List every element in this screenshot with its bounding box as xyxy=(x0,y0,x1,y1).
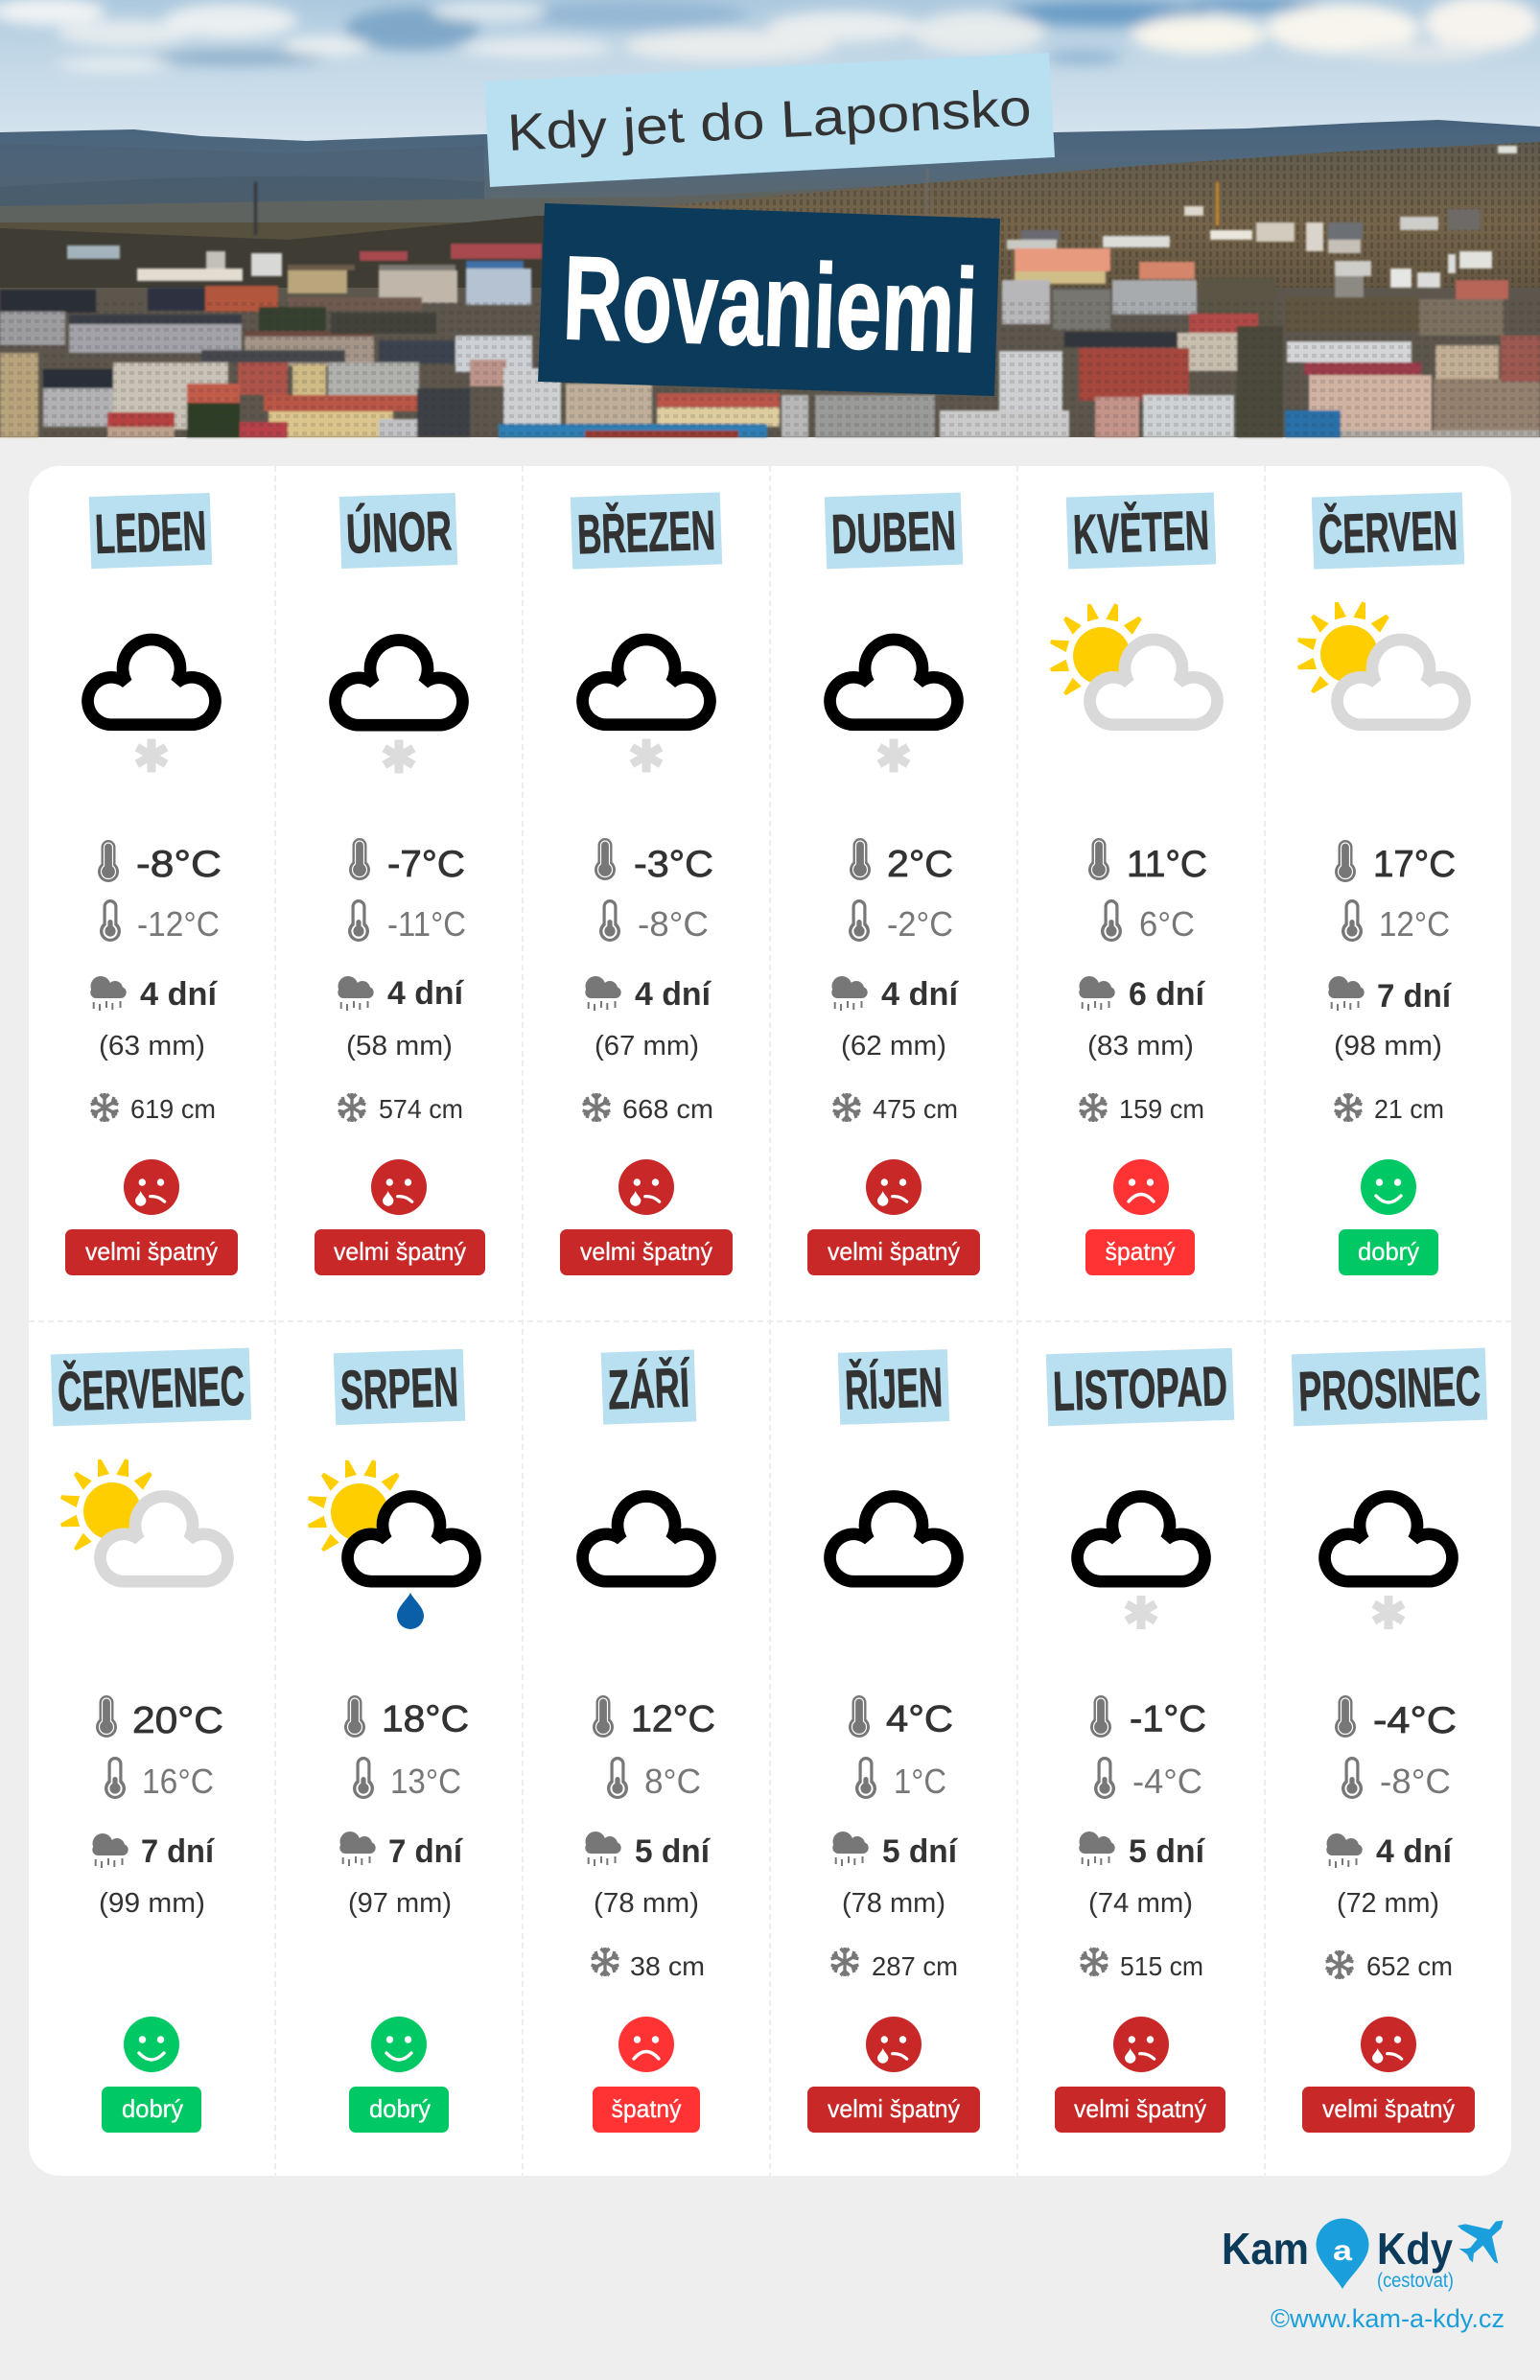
month heading: ČERVENEC xyxy=(51,1348,251,1426)
rainy days xyxy=(339,1832,464,1870)
month heading: ŘÍJEN xyxy=(838,1349,949,1425)
low temperature: 6°C xyxy=(1139,904,1195,944)
column: PROSINEC xyxy=(1292,1348,1487,2133)
rainy days: 5 dní xyxy=(635,1833,712,1870)
rainy days xyxy=(832,1832,959,1870)
rainy days xyxy=(1328,976,1453,1015)
rating badge: dobrý xyxy=(369,2094,431,2123)
high temperature xyxy=(849,1695,953,1739)
rainy days: 7 dní xyxy=(141,1833,215,1870)
month heading: ČERVENEC: ČERVENEC xyxy=(57,1355,245,1423)
icon: rating face xyxy=(866,2017,922,2072)
rainy days xyxy=(585,1832,712,1870)
high temperature: -4°C xyxy=(1373,1700,1457,1741)
snowfall: 515 cm xyxy=(1120,1951,1203,1981)
low temperature xyxy=(855,1757,946,1801)
low temperature xyxy=(1342,899,1450,944)
rainy days: 4 dní xyxy=(635,976,712,1013)
icon: rating face xyxy=(371,1159,427,1215)
title banner: Kdy jet do Laponsko: Kdy jet do Laponsko xyxy=(506,79,1033,162)
icon: rating face xyxy=(618,1159,674,1215)
snowfall: 38 cm xyxy=(630,1951,705,1981)
precipitation: (78 mm) xyxy=(594,1888,699,1919)
icon: rating face xyxy=(1113,1159,1169,1215)
month heading: KVĚTEN: KVĚTEN xyxy=(1072,500,1210,566)
snowfall: 21 cm xyxy=(1374,1094,1444,1124)
column: ČERVEN xyxy=(1297,492,1464,1275)
snowfall xyxy=(830,1948,958,1981)
high temperature xyxy=(595,838,713,885)
rainy days: 5 dní xyxy=(882,1833,959,1870)
rating badge: velmi špatný xyxy=(334,1237,466,1266)
rating badge: velmi špatný xyxy=(1322,2094,1455,2123)
column: KVĚTEN xyxy=(1050,492,1217,1275)
logo: Kam a Kdy xyxy=(1222,2219,1504,2292)
rainy days xyxy=(585,976,712,1013)
low temperature: -11°C xyxy=(387,904,466,944)
rainy days: 4 dní xyxy=(387,975,465,1012)
logo: Kam a Kdy: a xyxy=(1333,2235,1352,2267)
column: BŘEZEN xyxy=(560,492,733,1275)
rating badge xyxy=(315,1229,485,1275)
high temperature: 4°C xyxy=(886,1699,953,1739)
rating badge xyxy=(593,2087,700,2133)
precipitation: (62 mm) xyxy=(841,1031,946,1062)
high temperature: 17°C xyxy=(1373,844,1456,885)
low temperature xyxy=(599,899,709,944)
rating badge: velmi špatný xyxy=(1074,2094,1206,2123)
high temperature xyxy=(593,1695,715,1739)
icon: cloud with snow xyxy=(1078,1497,1204,1629)
title panel: Rovaniemi xyxy=(538,203,1000,396)
snowfall xyxy=(1325,1950,1453,1981)
rating badge: velmi špatný xyxy=(828,2094,960,2123)
icon: sun, dark cloud, rain drop xyxy=(308,1459,475,1629)
snowfall xyxy=(832,1093,958,1124)
rainy days: 4 dní xyxy=(140,976,219,1013)
rating badge xyxy=(807,2087,980,2133)
rating badge: dobrý xyxy=(1358,1237,1419,1266)
column: LEDEN xyxy=(65,493,238,1275)
high temperature: 2°C xyxy=(887,844,953,885)
icon: cloud with snow xyxy=(583,640,710,773)
panel: months card xyxy=(29,466,1511,2176)
precipitation: (78 mm) xyxy=(842,1888,945,1919)
icon: sun behind light cloud xyxy=(60,1458,227,1581)
snowfall: 287 cm xyxy=(872,1951,958,1981)
rating badge xyxy=(349,2087,449,2133)
low temperature xyxy=(1342,1757,1451,1801)
high temperature xyxy=(98,840,222,885)
high temperature: -1°C xyxy=(1130,1699,1206,1739)
rating badge xyxy=(1085,1229,1195,1275)
column: ÚNOR xyxy=(315,493,485,1275)
low temperature: -2°C xyxy=(887,904,953,944)
low temperature xyxy=(1101,899,1195,944)
icon: cloud with snow xyxy=(88,640,215,773)
icon: rating face xyxy=(124,1159,179,1215)
high temperature: 12°C xyxy=(631,1699,715,1739)
low temperature: -12°C xyxy=(137,904,220,944)
low temperature: -4°C xyxy=(1132,1762,1202,1801)
icon: sun behind light cloud xyxy=(1297,601,1464,725)
title panel: Rovaniemi: Rovaniemi xyxy=(561,232,979,378)
high temperature xyxy=(850,838,953,885)
icon: airplane xyxy=(1458,2221,1504,2264)
high temperature: 18°C xyxy=(382,1699,469,1739)
rating badge xyxy=(807,1229,980,1275)
icon: cloud with snow xyxy=(336,641,462,773)
rating badge xyxy=(1339,1229,1438,1275)
icon: rating face xyxy=(1361,2017,1416,2072)
rainy days: 4 dní xyxy=(1376,1833,1454,1870)
high temperature: -7°C xyxy=(387,844,465,885)
rating badge: dobrý xyxy=(122,2094,183,2123)
month heading: ZÁŘÍ xyxy=(601,1349,696,1425)
low temperature: 16°C xyxy=(142,1762,214,1801)
rainy days xyxy=(90,976,219,1013)
high temperature xyxy=(1090,1695,1206,1739)
snowfall xyxy=(582,1093,713,1124)
low temperature: -8°C xyxy=(638,904,709,944)
icon: rating face xyxy=(1361,1159,1416,1215)
snowfall: 574 cm xyxy=(379,1094,463,1124)
rainy days xyxy=(338,975,465,1012)
snowfall: 475 cm xyxy=(873,1094,958,1124)
low temperature: 8°C xyxy=(644,1762,701,1801)
snowfall xyxy=(1080,1948,1203,1981)
low temperature: 1°C xyxy=(894,1762,946,1801)
website url: ©www.kam-a-kdy.cz xyxy=(1271,2304,1505,2333)
low temperature xyxy=(849,899,953,944)
snowfall xyxy=(591,1948,705,1981)
column: LISTOPAD xyxy=(1046,1348,1234,2133)
precipitation: (74 mm) xyxy=(1088,1888,1193,1919)
month heading: ÚNOR: ÚNOR xyxy=(345,500,453,566)
column: SRPEN xyxy=(308,1349,475,2133)
snowfall xyxy=(1334,1093,1444,1124)
month heading: LEDEN xyxy=(89,493,212,569)
precipitation: (99 mm) xyxy=(99,1888,205,1919)
low temperature: 12°C xyxy=(1379,904,1450,944)
rainy days: 7 dní xyxy=(1377,978,1453,1015)
logo: Kam a Kdy: (cestovat) xyxy=(1377,2270,1454,2292)
logo: Kam a Kdy: Kam xyxy=(1222,2224,1309,2274)
high temperature: 20°C xyxy=(132,1700,223,1741)
high temperature: 11°C xyxy=(1127,844,1207,885)
high temperature: -8°C xyxy=(136,844,222,885)
rainy days xyxy=(92,1833,215,1870)
snowfall: 159 cm xyxy=(1119,1094,1204,1124)
low temperature xyxy=(100,899,220,944)
snowfall: 652 cm xyxy=(1366,1951,1453,1981)
high temperature xyxy=(96,1695,223,1741)
rating badge: špatný xyxy=(612,2094,681,2123)
month heading: LISTOPAD: LISTOPAD xyxy=(1052,1355,1228,1423)
snowfall xyxy=(338,1093,463,1124)
rainy days xyxy=(1326,1833,1454,1870)
column: ŘÍJEN xyxy=(807,1349,980,2133)
icon: rating face xyxy=(866,1159,922,1215)
column: ČERVENEC xyxy=(51,1348,251,2133)
rainy days: 6 dní xyxy=(1129,976,1206,1013)
precipitation: (72 mm) xyxy=(1337,1888,1439,1919)
rating badge: velmi špatný xyxy=(85,1237,218,1266)
rating badge xyxy=(560,1229,733,1275)
logo: Kam a Kdy: Kdy xyxy=(1377,2224,1453,2274)
snowfall xyxy=(90,1093,216,1124)
rating badge: velmi špatný xyxy=(828,1237,960,1266)
high temperature xyxy=(1088,838,1207,885)
precipitation: (83 mm) xyxy=(1087,1031,1194,1062)
rainy days xyxy=(1079,1832,1206,1870)
rainy days: 4 dní xyxy=(881,976,960,1013)
low temperature xyxy=(348,899,466,944)
rating badge xyxy=(1302,2087,1475,2133)
precipitation: (58 mm) xyxy=(346,1031,453,1062)
low temperature: 13°C xyxy=(390,1762,461,1801)
rainy days: 5 dní xyxy=(1129,1833,1206,1870)
month heading: ZÁŘÍ: ZÁŘÍ xyxy=(607,1357,691,1421)
icon: cloud with snow xyxy=(830,640,957,773)
column: DUBEN xyxy=(807,493,980,1275)
precipitation: (67 mm) xyxy=(595,1031,699,1062)
icon: rating face xyxy=(371,2017,427,2072)
rainy days: 7 dní xyxy=(388,1833,464,1870)
high temperature xyxy=(1335,840,1456,885)
low temperature xyxy=(353,1757,461,1801)
snowfall: 619 cm xyxy=(130,1094,216,1124)
high temperature xyxy=(349,838,465,885)
high temperature xyxy=(1335,1695,1457,1741)
icon: cloud xyxy=(583,1497,710,1581)
icon: sun behind light cloud xyxy=(1050,603,1217,725)
icon: rating face xyxy=(618,2017,674,2072)
month heading: DUBEN xyxy=(825,493,963,569)
icon: cloud xyxy=(830,1497,957,1581)
low temperature xyxy=(105,1757,214,1801)
photo: Rovaniemi panorama header xyxy=(0,0,1540,437)
rainy days xyxy=(1079,976,1206,1013)
snowfall: 668 cm xyxy=(622,1094,713,1124)
icon: map pin xyxy=(1316,2219,1369,2289)
rating badge: špatný xyxy=(1105,1237,1176,1266)
low temperature xyxy=(1094,1757,1202,1801)
month heading: KVĚTEN xyxy=(1066,492,1216,570)
precipitation: (63 mm) xyxy=(99,1031,205,1062)
title banner: Kdy jet do Laponsko xyxy=(484,53,1055,187)
icon: rating face xyxy=(124,2017,179,2072)
month heading: LISTOPAD xyxy=(1046,1348,1234,1426)
precipitation: (98 mm) xyxy=(1334,1031,1442,1062)
rating badge xyxy=(102,2087,201,2133)
column: ZÁŘÍ xyxy=(583,1349,715,2133)
month heading: BŘEZEN xyxy=(571,492,722,570)
rating badge: velmi špatný xyxy=(580,1237,712,1266)
low temperature: -8°C xyxy=(1380,1762,1451,1801)
snowfall xyxy=(1079,1093,1204,1124)
icon: cloud with snow xyxy=(1325,1497,1452,1629)
rating badge xyxy=(1055,2087,1225,2133)
month heading: BŘEZEN: BŘEZEN xyxy=(576,500,716,566)
month heading: ŘÍJEN: ŘÍJEN xyxy=(844,1356,944,1422)
month heading: DUBEN: DUBEN xyxy=(830,500,957,566)
month heading: SRPEN xyxy=(334,1349,465,1425)
icon: rating face xyxy=(1113,2017,1169,2072)
rating badge xyxy=(65,1229,238,1275)
high temperature: -3°C xyxy=(634,844,713,885)
high temperature xyxy=(344,1695,469,1739)
low temperature xyxy=(607,1757,701,1801)
month heading: ČERVEN xyxy=(1312,492,1464,570)
precipitation: (97 mm) xyxy=(348,1888,452,1919)
month heading: SRPEN: SRPEN xyxy=(339,1356,459,1422)
month heading: ÚNOR xyxy=(339,493,457,569)
rainy days xyxy=(831,976,960,1013)
month heading: LEDEN: LEDEN xyxy=(94,500,207,566)
